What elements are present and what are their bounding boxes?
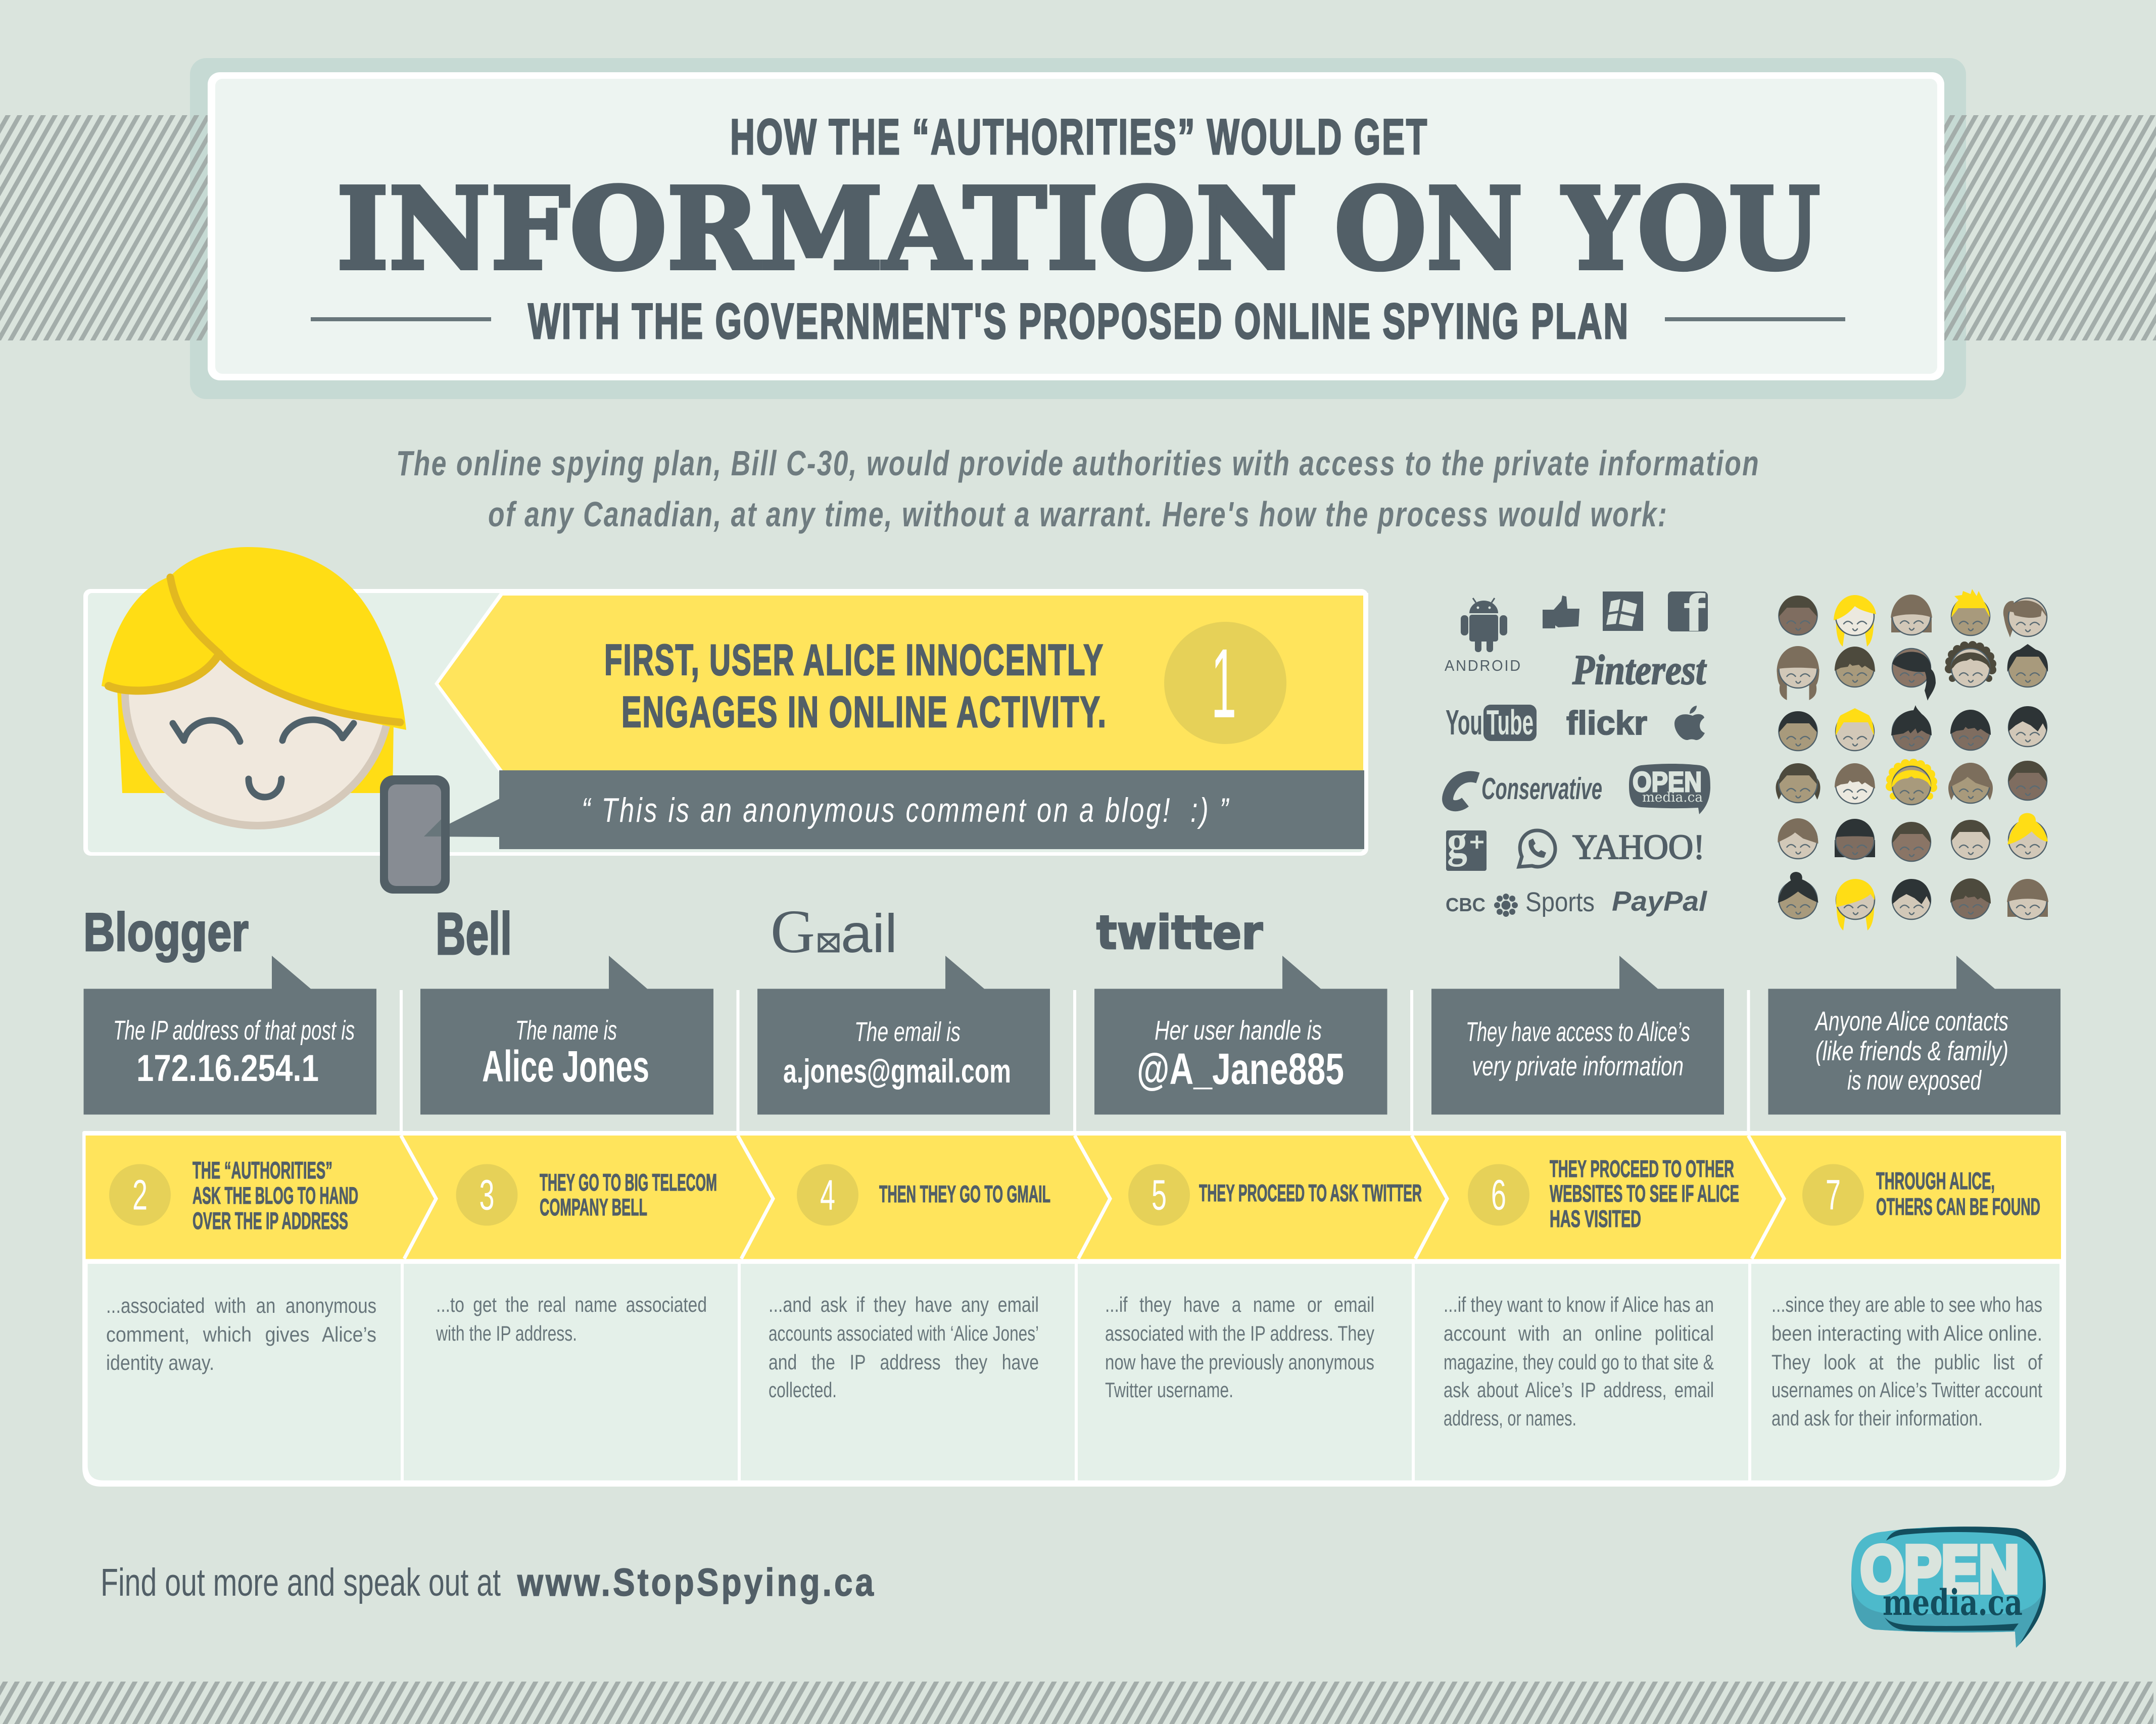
step 5 xyxy=(1128,1164,1422,1225)
icon: facebook xyxy=(1668,584,1708,643)
description 3: ...and ask if they have any email xyxy=(769,1293,1039,1316)
description 1: comment, which gives Alice’s xyxy=(106,1322,376,1346)
callout 2: The name is xyxy=(515,1015,617,1046)
description 6: been interacting with Alice online. xyxy=(1771,1321,2042,1345)
logo: openmedia small: media.ca xyxy=(1642,790,1703,805)
description 5: ask about Alice’s IP address, email xyxy=(1444,1378,1714,1402)
callout 1: The IP address of that post is xyxy=(113,1015,355,1046)
bottom stripe band xyxy=(0,1682,2153,1724)
callout 2: Alice Jones xyxy=(482,1042,649,1091)
callout 1 xyxy=(84,956,376,1114)
callout 6: is now exposed xyxy=(1847,1065,1982,1096)
logo: OpenMedia: media.ca xyxy=(1883,1582,2023,1623)
description 3 xyxy=(769,1293,1039,1402)
step 2: OVER THE IP ADDRESS xyxy=(193,1207,348,1234)
step 2: ASK THE BLOG TO HAND xyxy=(193,1182,358,1209)
speech bar xyxy=(424,770,1364,849)
description 1: ...associated with an anonymous xyxy=(106,1294,376,1317)
logo: youtube: Tube xyxy=(1487,703,1534,742)
callout 5: very private information xyxy=(1472,1051,1684,1081)
logo: Blogger: Blogger xyxy=(83,902,249,962)
description 4: ...if they have a name or email xyxy=(1105,1293,1374,1316)
logo cloud xyxy=(1445,584,1710,917)
logo: Gmail: G xyxy=(771,898,815,966)
logo: paypal: PayPal xyxy=(1612,885,1708,917)
logo: yahoo: YAHOO! xyxy=(1572,828,1705,867)
callout 4: @A_Jane885 xyxy=(1137,1045,1344,1094)
footer call to action: www.StopSpying.ca xyxy=(517,1561,876,1604)
step 4: 4 xyxy=(820,1171,835,1218)
step 4: THEN THEY GO TO GMAIL xyxy=(879,1180,1050,1207)
step 3: 3 xyxy=(479,1171,494,1218)
logo: cbc sports: CBC xyxy=(1446,895,1486,916)
description 5: magazine, they could go to that site & xyxy=(1444,1350,1714,1374)
step 4 xyxy=(797,1164,1050,1225)
step 2 xyxy=(109,1157,358,1234)
description 6: They look at the public list of xyxy=(1771,1350,2042,1374)
callout 3: The email is xyxy=(854,1017,961,1047)
logo: twitter: twitter xyxy=(1096,906,1263,960)
speech bar: “ This is an anonymous comment on a blog! :) ” xyxy=(582,791,1230,829)
step 6: WEBSITES TO SEE IF ALICE xyxy=(1550,1180,1739,1207)
callout 3: a.jones@gmail.com xyxy=(783,1052,1011,1090)
description 5: account with an online political xyxy=(1444,1321,1714,1345)
logo: Bell: Bell xyxy=(436,901,512,967)
step 2: THE “AUTHORITIES” xyxy=(193,1157,332,1184)
intro text xyxy=(396,444,1760,534)
description 1: identity away. xyxy=(106,1351,214,1374)
heading line 3: WITH THE GOVERNMENT'S PROPOSED ONLINE SPYING PLAN xyxy=(528,293,1630,349)
step 6 xyxy=(1468,1155,1739,1232)
logo: openmedia small xyxy=(1629,764,1710,814)
steps table xyxy=(82,1131,2066,1487)
character: Alice xyxy=(102,547,406,829)
logo: cbc sports xyxy=(1446,887,1595,917)
faces grid xyxy=(1776,589,2048,930)
icon: apple xyxy=(1674,706,1705,740)
main title: ON xyxy=(1334,164,1523,295)
description 1 xyxy=(106,1294,376,1374)
company logos row xyxy=(83,898,1263,967)
callout 6 xyxy=(1768,956,2061,1114)
callout 3 xyxy=(757,956,1050,1114)
banner: step 1 xyxy=(435,593,1368,773)
logo: flickr: flickr xyxy=(1566,704,1647,742)
step 3 xyxy=(456,1164,717,1225)
heading line 1: HOW THE “AUTHORITIES” WOULD GET xyxy=(730,109,1428,165)
description 4: Twitter username. xyxy=(1105,1378,1233,1402)
icon: phone xyxy=(380,775,450,894)
callout 5 xyxy=(1431,956,1724,1114)
description 4 xyxy=(1105,1293,1374,1402)
icon: google plus: g xyxy=(1447,817,1467,867)
callout 1: 172.16.254.1 xyxy=(136,1047,319,1089)
step 3: THEY GO TO BIG TELECOM xyxy=(540,1169,717,1196)
icon: android xyxy=(1445,598,1522,674)
main title: YOU xyxy=(1562,164,1820,295)
step 3: COMPANY BELL xyxy=(540,1194,647,1220)
description 2 xyxy=(436,1293,707,1345)
icon: google plus xyxy=(1446,817,1487,871)
banner: step 1: FIRST, USER ALICE INNOCENTLY xyxy=(604,636,1104,684)
logo: Gmail: ail xyxy=(841,903,897,964)
logo: Gmail xyxy=(771,898,897,966)
icon: thumbs up xyxy=(1543,596,1579,628)
description 5 xyxy=(1444,1293,1714,1430)
logo: youtube: You xyxy=(1446,703,1482,742)
logo: pinterest: Pinterest xyxy=(1572,647,1707,694)
step 2: 2 xyxy=(132,1171,148,1218)
step 6: HAS VISITED xyxy=(1550,1205,1641,1232)
step 7: OTHERS CAN BE FOUND xyxy=(1876,1193,2040,1220)
callout 4: Her user handle is xyxy=(1155,1015,1322,1046)
logo: OpenMedia xyxy=(1851,1526,2046,1648)
main title xyxy=(337,164,1820,295)
footer call to action: Find out more and speak out at xyxy=(101,1561,501,1604)
step 6: 6 xyxy=(1491,1171,1506,1218)
logo: OpenMedia: OPEN xyxy=(1860,1532,2019,1606)
column dividers xyxy=(400,990,1750,1137)
footer call to action xyxy=(101,1561,876,1604)
callout 4 xyxy=(1094,956,1387,1114)
callout 5: They have access to Alice’s xyxy=(1466,1017,1690,1047)
description 4: now have the previously anonymous xyxy=(1105,1350,1374,1374)
callout 6: (like friends & family) xyxy=(1815,1036,2008,1066)
banner: step 1: 1 xyxy=(1211,628,1236,738)
icon: windows xyxy=(1603,592,1643,631)
intro text: of any Canadian, at any time, without a warrant. Here's how the process would work: xyxy=(488,495,1668,534)
step 5: THEY PROCEED TO ASK TWITTER xyxy=(1199,1179,1422,1206)
icon: facebook: f xyxy=(1683,584,1705,643)
logo: conservative xyxy=(1448,772,1602,806)
callout 2 xyxy=(420,956,713,1114)
icon: android: ANDROID xyxy=(1445,657,1522,674)
step chevrons xyxy=(401,1136,1784,1259)
step 7: THROUGH ALICE, xyxy=(1876,1167,1995,1194)
description 6: usernames on Alice’s Twitter account xyxy=(1771,1378,2042,1402)
step 7 xyxy=(1802,1164,2040,1225)
description 2: with the IP address. xyxy=(436,1321,577,1345)
step 6: THEY PROCEED TO OTHER xyxy=(1550,1155,1734,1182)
banner: step 1: ENGAGES IN ONLINE ACTIVITY. xyxy=(621,688,1107,736)
callout 6: Anyone Alice contacts xyxy=(1814,1006,2008,1037)
description 4: associated with the IP address. They xyxy=(1105,1321,1374,1345)
logo: conservative: Conservative xyxy=(1481,772,1602,806)
description 6: and ask for their information. xyxy=(1771,1406,1983,1430)
description 6 xyxy=(1771,1293,2042,1430)
logo: cbc sports: Sports xyxy=(1525,887,1595,917)
intro text: The online spying plan, Bill C-30, would provide authorities with access to the private information xyxy=(396,444,1760,483)
description 3: and the IP address they have xyxy=(769,1350,1039,1374)
description 3: collected. xyxy=(769,1378,837,1402)
description 3: accounts associated with ‘Alice Jones’ xyxy=(769,1321,1039,1345)
description 5: address, or names. xyxy=(1444,1406,1576,1430)
step 5: 5 xyxy=(1152,1171,1167,1218)
step 7: 7 xyxy=(1826,1171,1841,1218)
main title: INFORMATION xyxy=(337,164,1298,295)
description 6: ...since they are able to see who has xyxy=(1771,1293,2042,1316)
icon: whatsapp xyxy=(1519,830,1555,867)
panel: Alice step 1 xyxy=(83,547,1368,894)
description 5: ...if they want to know if Alice has an xyxy=(1444,1293,1714,1316)
title panel xyxy=(0,58,2156,399)
logo: openmedia small: OPEN xyxy=(1633,766,1702,798)
description 2: ...to get the real name associated xyxy=(436,1293,707,1316)
